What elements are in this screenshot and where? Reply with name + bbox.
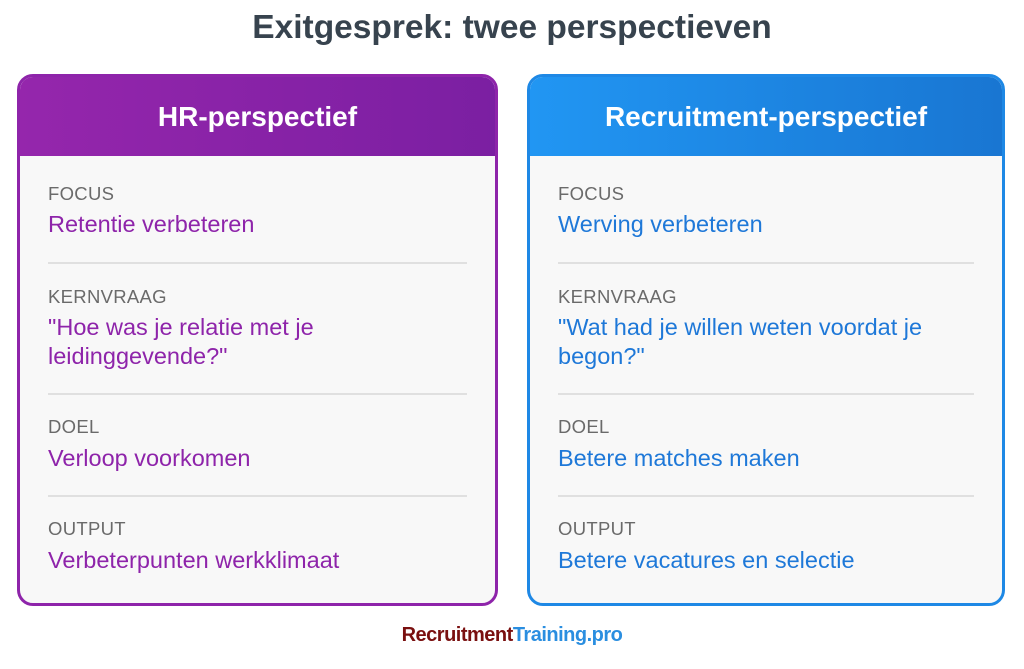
value: kernvraag: leidinggevende?" (48, 343, 228, 369)
label: doel: DOEL (48, 416, 100, 437)
panel: Recruitment (527, 74, 1005, 606)
value: focus: Retentie verbeteren (48, 211, 254, 237)
value: output: Verbeterpunten werkklimaat (48, 547, 339, 573)
logo: RecruitmentTraining.pro (402, 624, 622, 646)
label: kernvraag: KERNVRAAG (558, 286, 677, 307)
value: kernvraag: "Wat had je willen weten voordat je (558, 314, 922, 340)
label: kernvraag: KERNVRAAG (48, 286, 167, 307)
label: output: OUTPUT (558, 518, 636, 539)
value: doel: Verloop voorkomen (48, 445, 250, 471)
label: output: OUTPUT (48, 518, 126, 539)
heading: recruitment (530, 77, 1002, 156)
label: doel: DOEL (558, 416, 610, 437)
value: focus: Werving verbeteren (558, 211, 763, 237)
value: kernvraag (48, 314, 314, 369)
panel: HR (17, 74, 498, 606)
value: kernvraag: "Hoe was je relatie met je (48, 314, 314, 340)
value: kernvraag (558, 314, 922, 369)
label: focus: FOCUS (48, 183, 114, 204)
title: Exitgesprek: twee perspectieven (252, 9, 772, 46)
value: output: Betere vacatures en selectie (558, 547, 855, 573)
label: focus: FOCUS (558, 183, 624, 204)
heading: recruitment: Recruitment-perspectief (605, 101, 927, 132)
heading: HR (20, 77, 495, 156)
value: doel: Betere matches maken (558, 445, 800, 471)
heading: HR: HR-perspectief (158, 101, 357, 132)
value: kernvraag: begon?" (558, 343, 645, 369)
